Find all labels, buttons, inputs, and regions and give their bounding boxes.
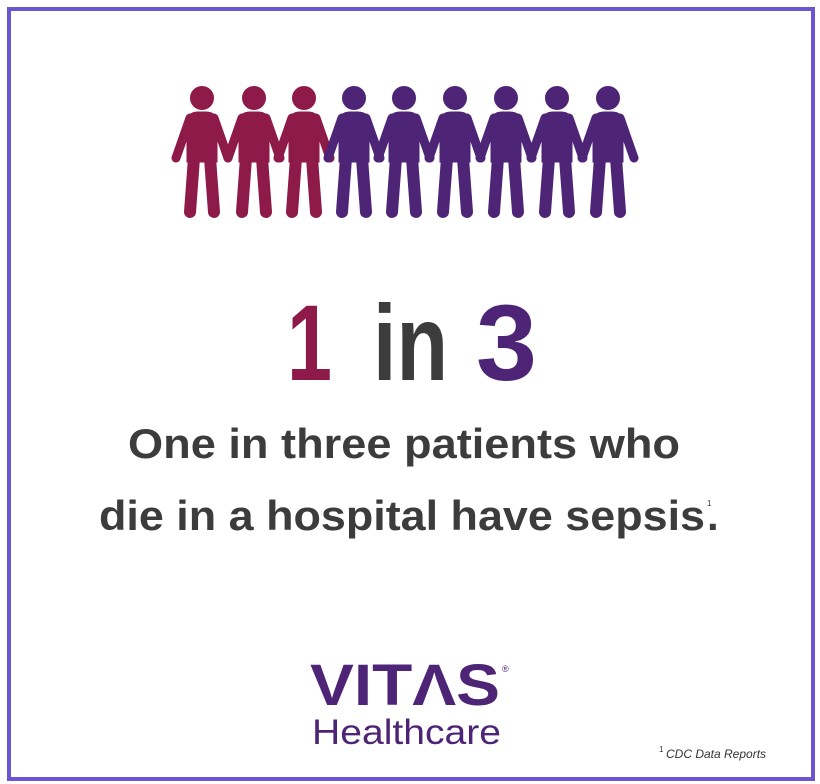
footnote: CDC Data Reports xyxy=(666,747,766,761)
statement text: die in a hospital have sepsis xyxy=(99,492,705,539)
logo: VITAS Healthcare: ® xyxy=(502,664,509,674)
statement text xyxy=(99,420,719,539)
headline statistic: 1 in 3: 3 xyxy=(476,282,537,403)
logo: VITAS Healthcare: Healthcare xyxy=(312,713,501,752)
headline statistic: 1 in 3 xyxy=(287,282,537,403)
statement text: 1 xyxy=(707,499,712,508)
headline statistic: 1 in 3: in xyxy=(373,282,448,403)
statement text: One in three patients who xyxy=(128,420,680,467)
logo: VITAS Healthcare: VITΛS xyxy=(310,653,500,718)
statement text: . xyxy=(707,492,719,539)
headline statistic: 1 in 3: 1 xyxy=(287,282,332,403)
footnote: 1 xyxy=(659,745,664,754)
icon: row of nine people holding hands xyxy=(176,86,634,212)
logo: VITAS Healthcare xyxy=(310,653,509,752)
